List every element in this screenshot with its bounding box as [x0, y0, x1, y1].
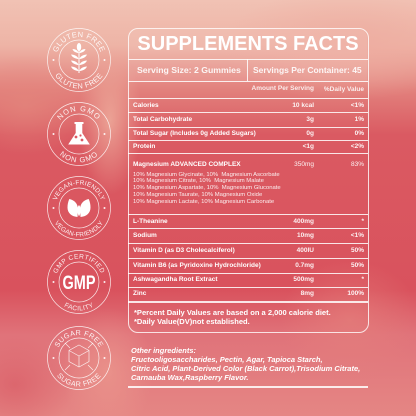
- nutrient rows: 400IU: [297, 247, 314, 254]
- nutrient rows: Total Carbohydrate: [133, 116, 192, 122]
- text: %Daily Value: [324, 86, 364, 92]
- badges column: GLUTEN FREE: [56, 73, 103, 89]
- nutrient rows: Ashwagandha Root Extract: [133, 276, 218, 283]
- badges column: SUGAR FREE: [58, 373, 101, 386]
- icon: leaves: [68, 199, 90, 217]
- title: SUPPLEMENTS FACTS: [137, 32, 359, 54]
- icon: cube: [65, 343, 93, 370]
- nutrient rows: 3g: [306, 116, 314, 122]
- icon: wheat: [71, 43, 87, 73]
- nutrient rows: 400mg: [293, 218, 314, 225]
- badges column: NON GMO: [60, 151, 97, 162]
- badges column: GMP CERTIFIED: [54, 254, 104, 273]
- serving size: Serving Size: 2 Gummies: [137, 65, 241, 75]
- nutrient rows: 8mg: [301, 290, 314, 297]
- nutrient rows: 1%: [355, 116, 364, 122]
- other ingredients: Citric Acid, Plant-Derived Color (Black Carrot),Trisodium Citrate,: [131, 364, 360, 372]
- nutrient rows: Protein: [133, 143, 155, 150]
- nutrient rows: 83%: [351, 161, 364, 168]
- nutrient rows: <1%: [351, 232, 364, 239]
- other ingredients: [131, 346, 360, 382]
- nutrient rows: 350mg: [294, 161, 314, 168]
- nutrient rows: 100%: [347, 290, 364, 297]
- nutrient rows: 0.7mg: [295, 262, 314, 269]
- nutrient rows: 0%: [355, 130, 364, 136]
- nutrient rows: Magnesium ADVANCED COMPLEX: [133, 161, 241, 168]
- badges column: SUGAR FREE: [54, 330, 104, 348]
- badges column: [47, 28, 111, 390]
- nutrient rows: 10% Magnesium Citrate, 10% Magnesium Malate: [133, 178, 264, 184]
- nutrient rows: L-Theanine: [133, 218, 168, 225]
- badges column: GLUTEN FREE: [53, 32, 106, 52]
- other ingredients: Carnauba Wax,Raspberry Flavor.: [131, 372, 248, 382]
- nutrient rows: <2%: [351, 143, 364, 150]
- nutrient rows: *: [361, 276, 364, 283]
- nutrient rows: 10% Magnesium Glycinate, 10% Magnesium Ascorbate: [133, 172, 280, 178]
- nutrient rows: *: [361, 218, 364, 225]
- footnotes: *Percent Daily Values are based on a 2,000 calorie diet.: [134, 308, 331, 316]
- nutrient rows: 500mg: [293, 276, 314, 283]
- nutrient rows: 10 kcal: [292, 102, 314, 108]
- panel: supplement facts: [128, 28, 369, 332]
- panel tint: title and serving rows: [129, 29, 367, 81]
- other ingredients: Other ingredients:: [131, 346, 196, 354]
- nutrient rows: <1g: [303, 143, 314, 150]
- nutrient rows: Sodium: [133, 232, 157, 239]
- nutrient rows: <1%: [351, 102, 364, 108]
- nutrient rows: Total Sugar (Includes 0g Added Sugars): [133, 130, 256, 136]
- nutrient rows: Zinc: [133, 290, 146, 297]
- icon: GMP: GMP: [62, 272, 96, 294]
- badges column: VEGAN-FRIENDLY: [52, 180, 106, 199]
- nutrient rows: 10% Magnesium Aspartate, 10% Magnesium Gluconate: [133, 185, 281, 191]
- nutrient rows: Vitamin B6 (as Pyridoxine Hydrochloride): [133, 262, 261, 269]
- nutrient rows: 10% Magnesium Taurate, 10% Magnesium Oxide: [133, 192, 262, 198]
- column headers: Amount Per Serving: [252, 85, 314, 92]
- nutrient rows: 10% Magnesium Lactate, 10% Magnesium Carbonate: [133, 199, 274, 205]
- nutrient rows: 10mg: [297, 232, 314, 239]
- nutrient rows: 0g: [306, 130, 314, 136]
- nutrient rows: Calories: [133, 102, 159, 108]
- badges column: NON GMO: [57, 106, 100, 120]
- footnotes: [134, 308, 331, 326]
- badges column: FACILITY: [64, 302, 92, 310]
- nutrient rows: 50%: [351, 262, 364, 269]
- nutrient rows: 50%: [351, 247, 364, 254]
- nutrient rows: Vitamin D (as D3 Cholecalciferol): [133, 247, 235, 254]
- badges column: VEGAN-FRIENDLY: [56, 220, 102, 237]
- footnotes: *Daily Value(DV)not established.: [134, 317, 250, 326]
- servings per container: Servings Per Container: 45: [253, 65, 362, 75]
- icon: flask: [68, 122, 90, 144]
- other ingredients: Fructooligosaccharides, Pectin, Agar, Tapioca Starch,: [131, 354, 323, 364]
